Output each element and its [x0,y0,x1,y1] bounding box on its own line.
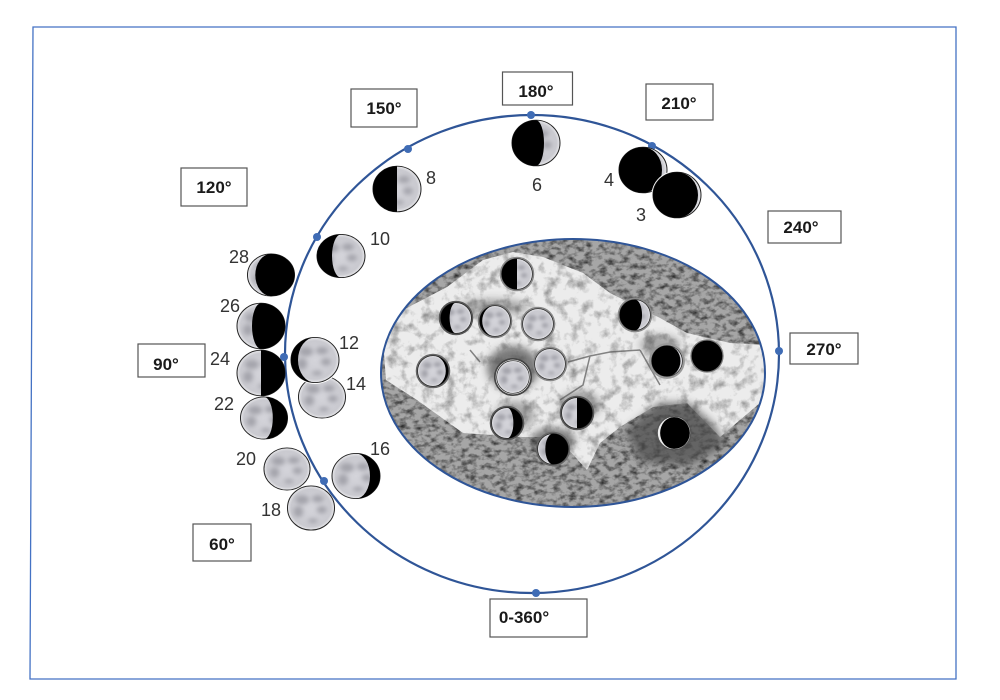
rock moon thin dark left [478,304,512,338]
moon 8 [373,166,436,212]
moons set in rock cups [416,257,724,466]
rock moon mostly dark left [618,298,652,332]
angle label 0-360: 0-360° [499,608,549,627]
moon 20 [236,448,310,490]
angle label 180 [502,72,572,105]
moon 20: 20 [236,449,256,469]
moon 18: 18 [261,500,281,520]
moon 14 [298,374,366,418]
moon 4 [604,147,667,193]
moon 26: 26 [220,296,240,316]
rock moon black thin left [657,416,691,450]
angle label 150: 150° [366,99,402,118]
angle label 0-360 [490,599,587,637]
angle label 90: 90° [153,355,179,374]
angle label 240: 240° [783,218,819,237]
angle label 210: 210° [661,94,697,113]
moon 8: 8 [426,168,436,188]
moon 28 [229,247,295,296]
moon 3: 3 [636,205,646,225]
moon 22 [214,394,288,439]
rock moon crescent dark left [439,301,473,335]
moon 16: 16 [370,439,390,459]
angle label 270 [790,333,858,364]
dark lichen patches on rock [457,299,725,465]
angle label 120 [181,168,247,206]
rock photograph in ellipse [380,238,770,508]
angle label 60 [193,524,251,561]
angle label 150 [351,89,417,127]
rock moon thin dark right [416,354,450,388]
rock moon half dark right [560,396,594,430]
moon 6: 6 [532,175,542,195]
grass background [380,238,770,508]
angle label 60: 60° [209,535,235,554]
moon 12 [290,333,359,384]
rock moon half dark left [500,257,534,291]
moon 24 [210,349,285,396]
moon 12: 12 [339,333,359,353]
rock moon nearly black [649,343,685,379]
moon 10 [317,229,390,278]
angle label 210 [646,84,713,120]
rock moon full [521,307,555,341]
moon 24: 24 [210,349,230,369]
orbit ring with angle markers [280,111,783,597]
moon 22: 22 [214,394,234,414]
moon 3 [636,171,702,225]
photo outline [381,239,765,507]
moon 4: 4 [604,170,614,190]
rock moon mostly dark right [536,432,570,466]
angle label 180: 180° [518,82,554,101]
angle label 90 [138,344,205,377]
rock moon black [690,339,724,373]
moon 26 [220,296,285,349]
moon 6 [512,120,560,195]
rock moon full upper [533,347,567,381]
angle label 120: 120° [196,178,232,197]
moon 28: 28 [229,247,249,267]
moon 18 [261,486,335,530]
marker dots [280,111,783,597]
rock moon crescent dark right [490,406,524,440]
angle label 240 [768,211,841,243]
rock cracks [470,350,660,400]
moon 14: 14 [346,374,366,394]
angle label 270: 270° [806,340,842,359]
moon 16 [332,439,390,499]
boulder [383,252,770,470]
rock moon full ringed [494,358,532,396]
moon 10: 10 [370,229,390,249]
